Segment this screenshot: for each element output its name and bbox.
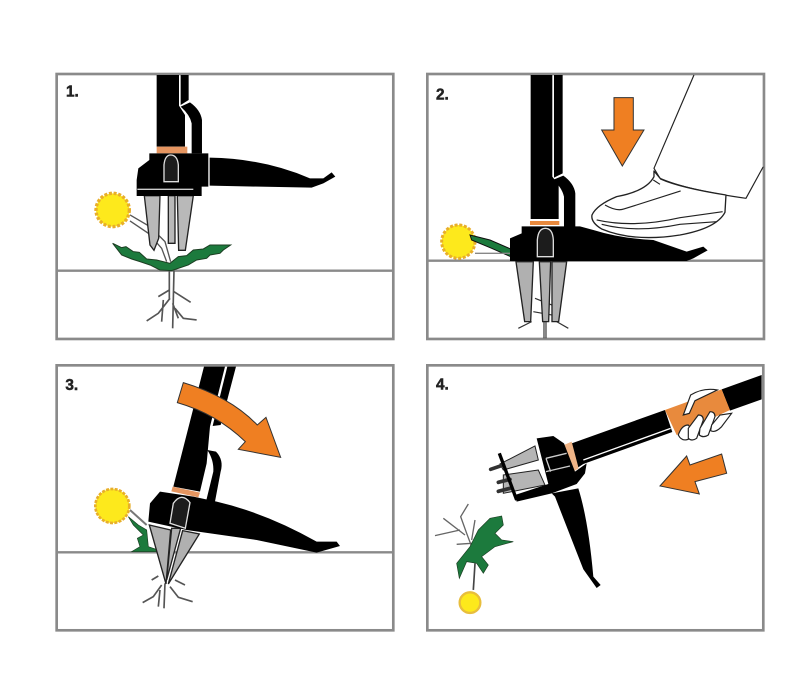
tool teeth — [144, 196, 193, 250]
hand — [678, 389, 732, 440]
panel 2: press the pedal with a foot — [427, 74, 764, 339]
weed roots — [435, 504, 475, 547]
panel 4 frame — [427, 365, 763, 630]
weed leaves — [457, 516, 513, 578]
leaves — [113, 243, 231, 271]
tool head and pedal — [148, 492, 340, 553]
panel 2 frame — [427, 74, 764, 339]
ground line — [427, 257, 764, 264]
tool teeth in soil — [516, 262, 567, 322]
panel 3 number: 3. — [65, 377, 78, 394]
weed stem — [473, 563, 475, 590]
tool teeth and plate — [491, 446, 545, 500]
dandelion flower — [95, 489, 129, 523]
stem — [130, 510, 147, 525]
tool handle — [157, 75, 202, 153]
arrow down — [602, 98, 644, 166]
stem and flower — [96, 193, 171, 262]
arrow left — [660, 454, 727, 494]
orange collar — [157, 147, 187, 153]
tool pedal — [552, 488, 601, 588]
root and stem — [518, 262, 568, 338]
tool head — [515, 436, 587, 502]
dandelion flower — [442, 225, 475, 258]
roots — [143, 576, 193, 608]
dandelion flower — [460, 592, 480, 613]
tool teeth — [149, 525, 199, 584]
panel 3 frame — [57, 365, 393, 630]
panel 2 number: 2. — [436, 86, 449, 103]
tool handle — [564, 375, 762, 472]
flower with leaf — [442, 225, 511, 258]
ground line — [57, 267, 393, 274]
roots — [147, 271, 197, 328]
orange grip — [665, 389, 730, 435]
foot and trouser — [592, 75, 763, 238]
dandelion flower — [96, 193, 129, 227]
tool head and pedal — [137, 153, 335, 196]
panel 1: position the tool over the weed — [57, 74, 393, 339]
orange collar — [530, 221, 559, 225]
panel 4 number: 4. — [436, 376, 449, 393]
tool handle — [530, 75, 575, 228]
panel 1 number: 1. — [66, 84, 79, 101]
pulled weed — [435, 504, 513, 613]
panel 1 frame — [57, 74, 393, 339]
tool handle — [171, 367, 236, 502]
ground line — [57, 549, 393, 556]
leaves — [128, 517, 173, 552]
panel 3: lever the tool backwards — [57, 365, 393, 630]
orange collar — [564, 442, 579, 472]
panel 4: eject the weed — [427, 365, 763, 630]
tool head and pedal — [510, 226, 708, 261]
orange collar — [171, 487, 200, 497]
curved arrow — [177, 383, 281, 457]
